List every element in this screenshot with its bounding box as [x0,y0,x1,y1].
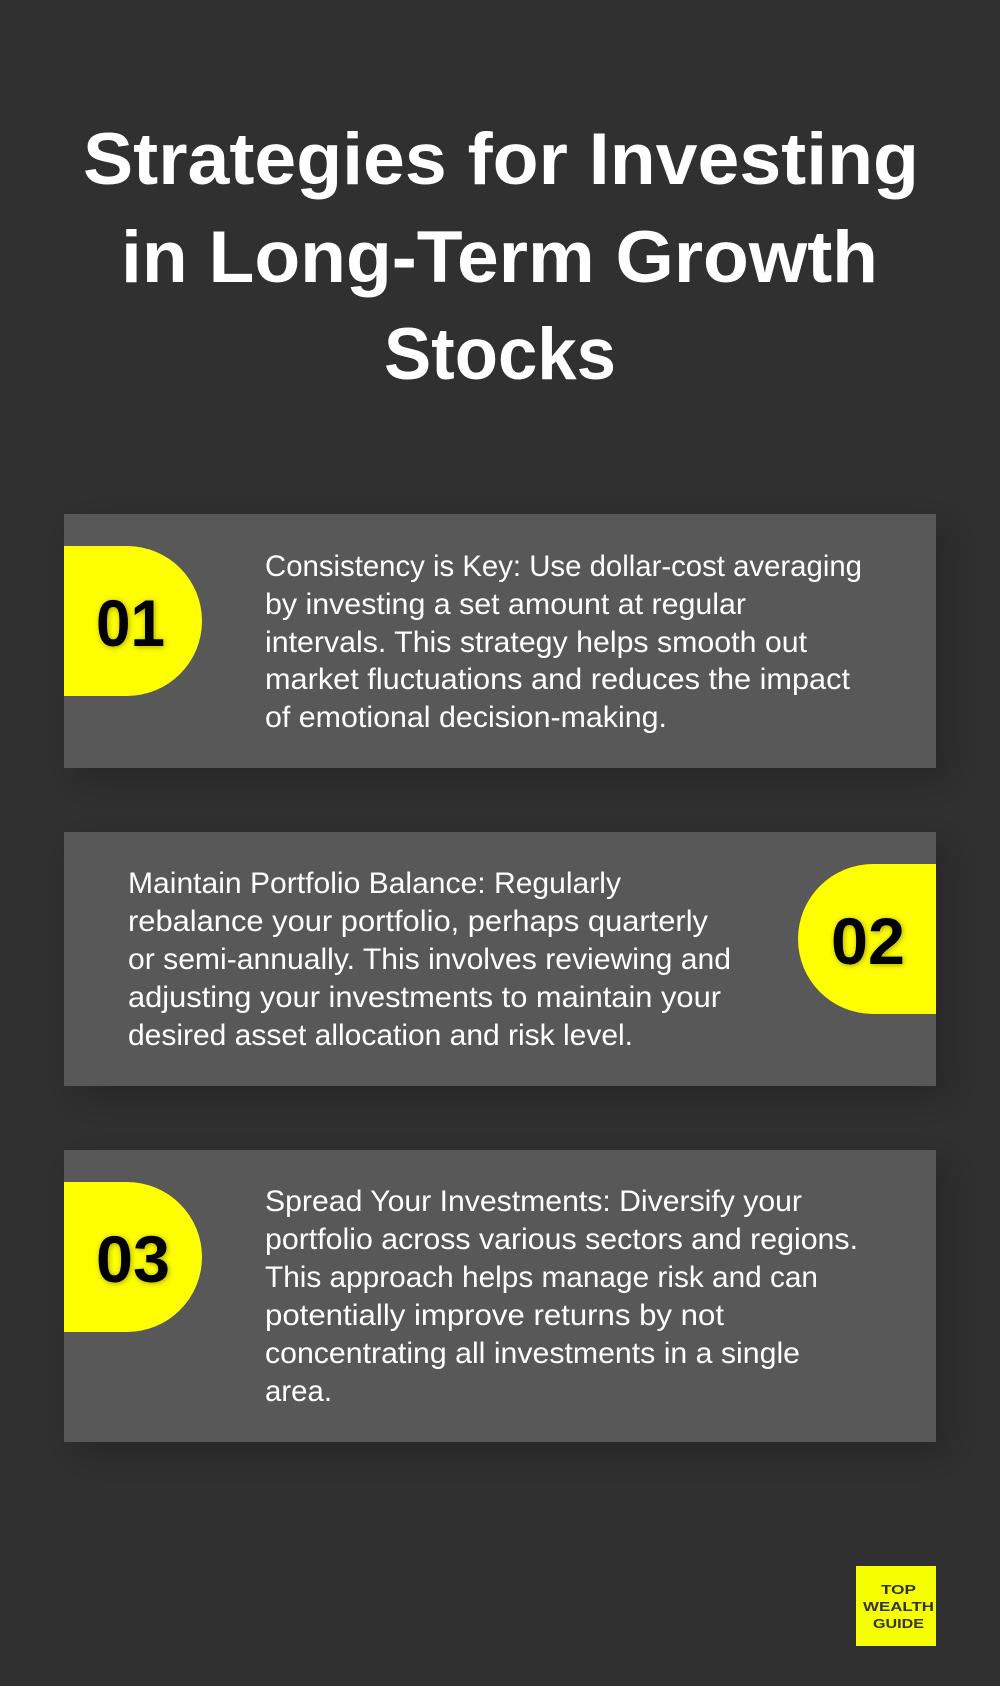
number badge 03: 03 [96,1222,170,1296]
text block 3: portfolio across various sectors and regions. [265,1223,858,1256]
text block 1: intervals. This strategy helps smooth out [265,626,807,659]
title: Stocks [384,314,616,395]
text block 2: adjusting your investments to maintain your [128,981,721,1014]
panel: step 3 diversification [64,1150,936,1442]
text block 2: rebalance your portfolio, perhaps quarterly [128,905,708,938]
number badge 02 [798,864,936,1014]
logo: Top Wealth Guide [856,1566,936,1646]
number badge 02: 02 [831,904,905,978]
text block 3: Spread Your Investments: Diversify your [265,1185,802,1218]
number badge 01: 01 [96,586,165,660]
panel background 3 [64,1150,936,1442]
text block 3: This approach helps manage risk and can [265,1261,818,1294]
text block 3: potentially improve returns by not [265,1299,724,1332]
text block 2 [128,867,731,1052]
panel background 2 [64,832,936,1086]
text block 3: concentrating all investments in a single [265,1337,800,1370]
logo: Top Wealth Guide: WEALTH [863,1599,934,1614]
logo: Top Wealth Guide: TOP [881,1582,916,1597]
text block 1 [265,550,862,734]
text block 3 [265,1185,858,1408]
text block 1: of emotional decision-making. [265,701,667,734]
title: in Long-Term Growth [121,217,878,298]
text block 1: market fluctuations and reduces the impact [265,663,850,696]
number badge 03 [64,1182,202,1332]
title: Strategies for Investing [83,119,919,200]
text block 1: by investing a set amount at regular [265,588,746,621]
text block 2: desired asset allocation and risk level. [128,1019,633,1052]
panel: step 1 dollar-cost averaging [64,514,936,768]
logo: Top Wealth Guide: GUIDE [873,1616,924,1631]
panel background 1 [64,514,936,768]
number badge 01 [64,546,202,696]
panel: step 2 rebalancing [64,832,936,1086]
text block 2: or semi-annually. This involves reviewing and [128,943,731,976]
text block 2: Maintain Portfolio Balance: Regularly [128,867,621,900]
text block 1: Consistency is Key: Use dollar-cost averaging [265,550,862,583]
title [83,119,919,395]
text block 3: area. [265,1375,332,1408]
